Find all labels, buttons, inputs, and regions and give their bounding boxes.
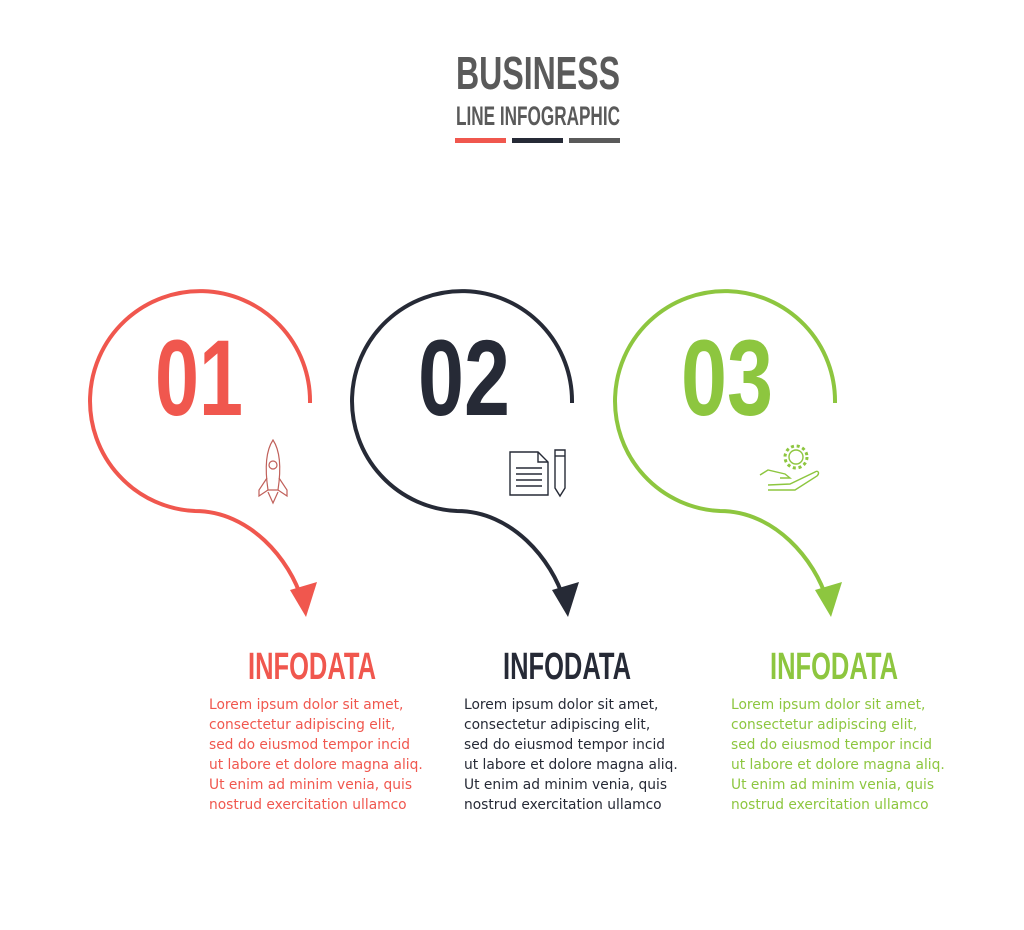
text block 3: consectetur adipiscing elit, <box>731 717 917 733</box>
number 01: 01 <box>155 317 243 438</box>
step 3 arrow <box>615 291 842 617</box>
text block 3: Lorem ipsum dolor sit amet, <box>731 697 925 713</box>
step 2 arrow <box>352 291 579 617</box>
icon: rocket <box>259 440 287 503</box>
text block 2: Lorem ipsum dolor sit amet, <box>464 697 658 713</box>
number 02: 02 <box>418 317 510 438</box>
title: BUSINESS <box>456 47 620 99</box>
text block 3: nostrud exercitation ullamco <box>731 797 929 813</box>
text block 2: Ut enim ad minim venia, quis <box>464 777 667 793</box>
text block 3: Ut enim ad minim venia, quis <box>731 777 934 793</box>
text block 1 <box>209 697 423 813</box>
title: LINE INFOGRAPHIC <box>456 101 620 131</box>
icon: hand with gear <box>760 446 818 490</box>
text block 3: sed do eiusmod tempor incid <box>731 737 932 753</box>
text block 1: consectetur adipiscing elit, <box>209 717 395 733</box>
title <box>455 47 620 143</box>
text block 2: consectetur adipiscing elit, <box>464 717 650 733</box>
text block 2 <box>464 697 678 813</box>
heading 2: INFODATA <box>503 646 631 688</box>
heading 1: INFODATA <box>248 646 376 688</box>
text block 3 <box>731 697 945 813</box>
step 1 arrow <box>90 291 317 617</box>
icon: document and pencil <box>510 450 565 496</box>
text block 1: Ut enim ad minim venia, quis <box>209 777 412 793</box>
text block 1: nostrud exercitation ullamco <box>209 797 407 813</box>
text block 2: nostrud exercitation ullamco <box>464 797 662 813</box>
text block 1: Lorem ipsum dolor sit amet, <box>209 697 403 713</box>
heading 3: INFODATA <box>770 646 898 688</box>
text block 2: sed do eiusmod tempor incid <box>464 737 665 753</box>
text block 2: ut labore et dolore magna aliq. <box>464 757 678 773</box>
number 03: 03 <box>681 317 773 438</box>
text block 3: ut labore et dolore magna aliq. <box>731 757 945 773</box>
text block 1: ut labore et dolore magna aliq. <box>209 757 423 773</box>
text block 1: sed do eiusmod tempor incid <box>209 737 410 753</box>
